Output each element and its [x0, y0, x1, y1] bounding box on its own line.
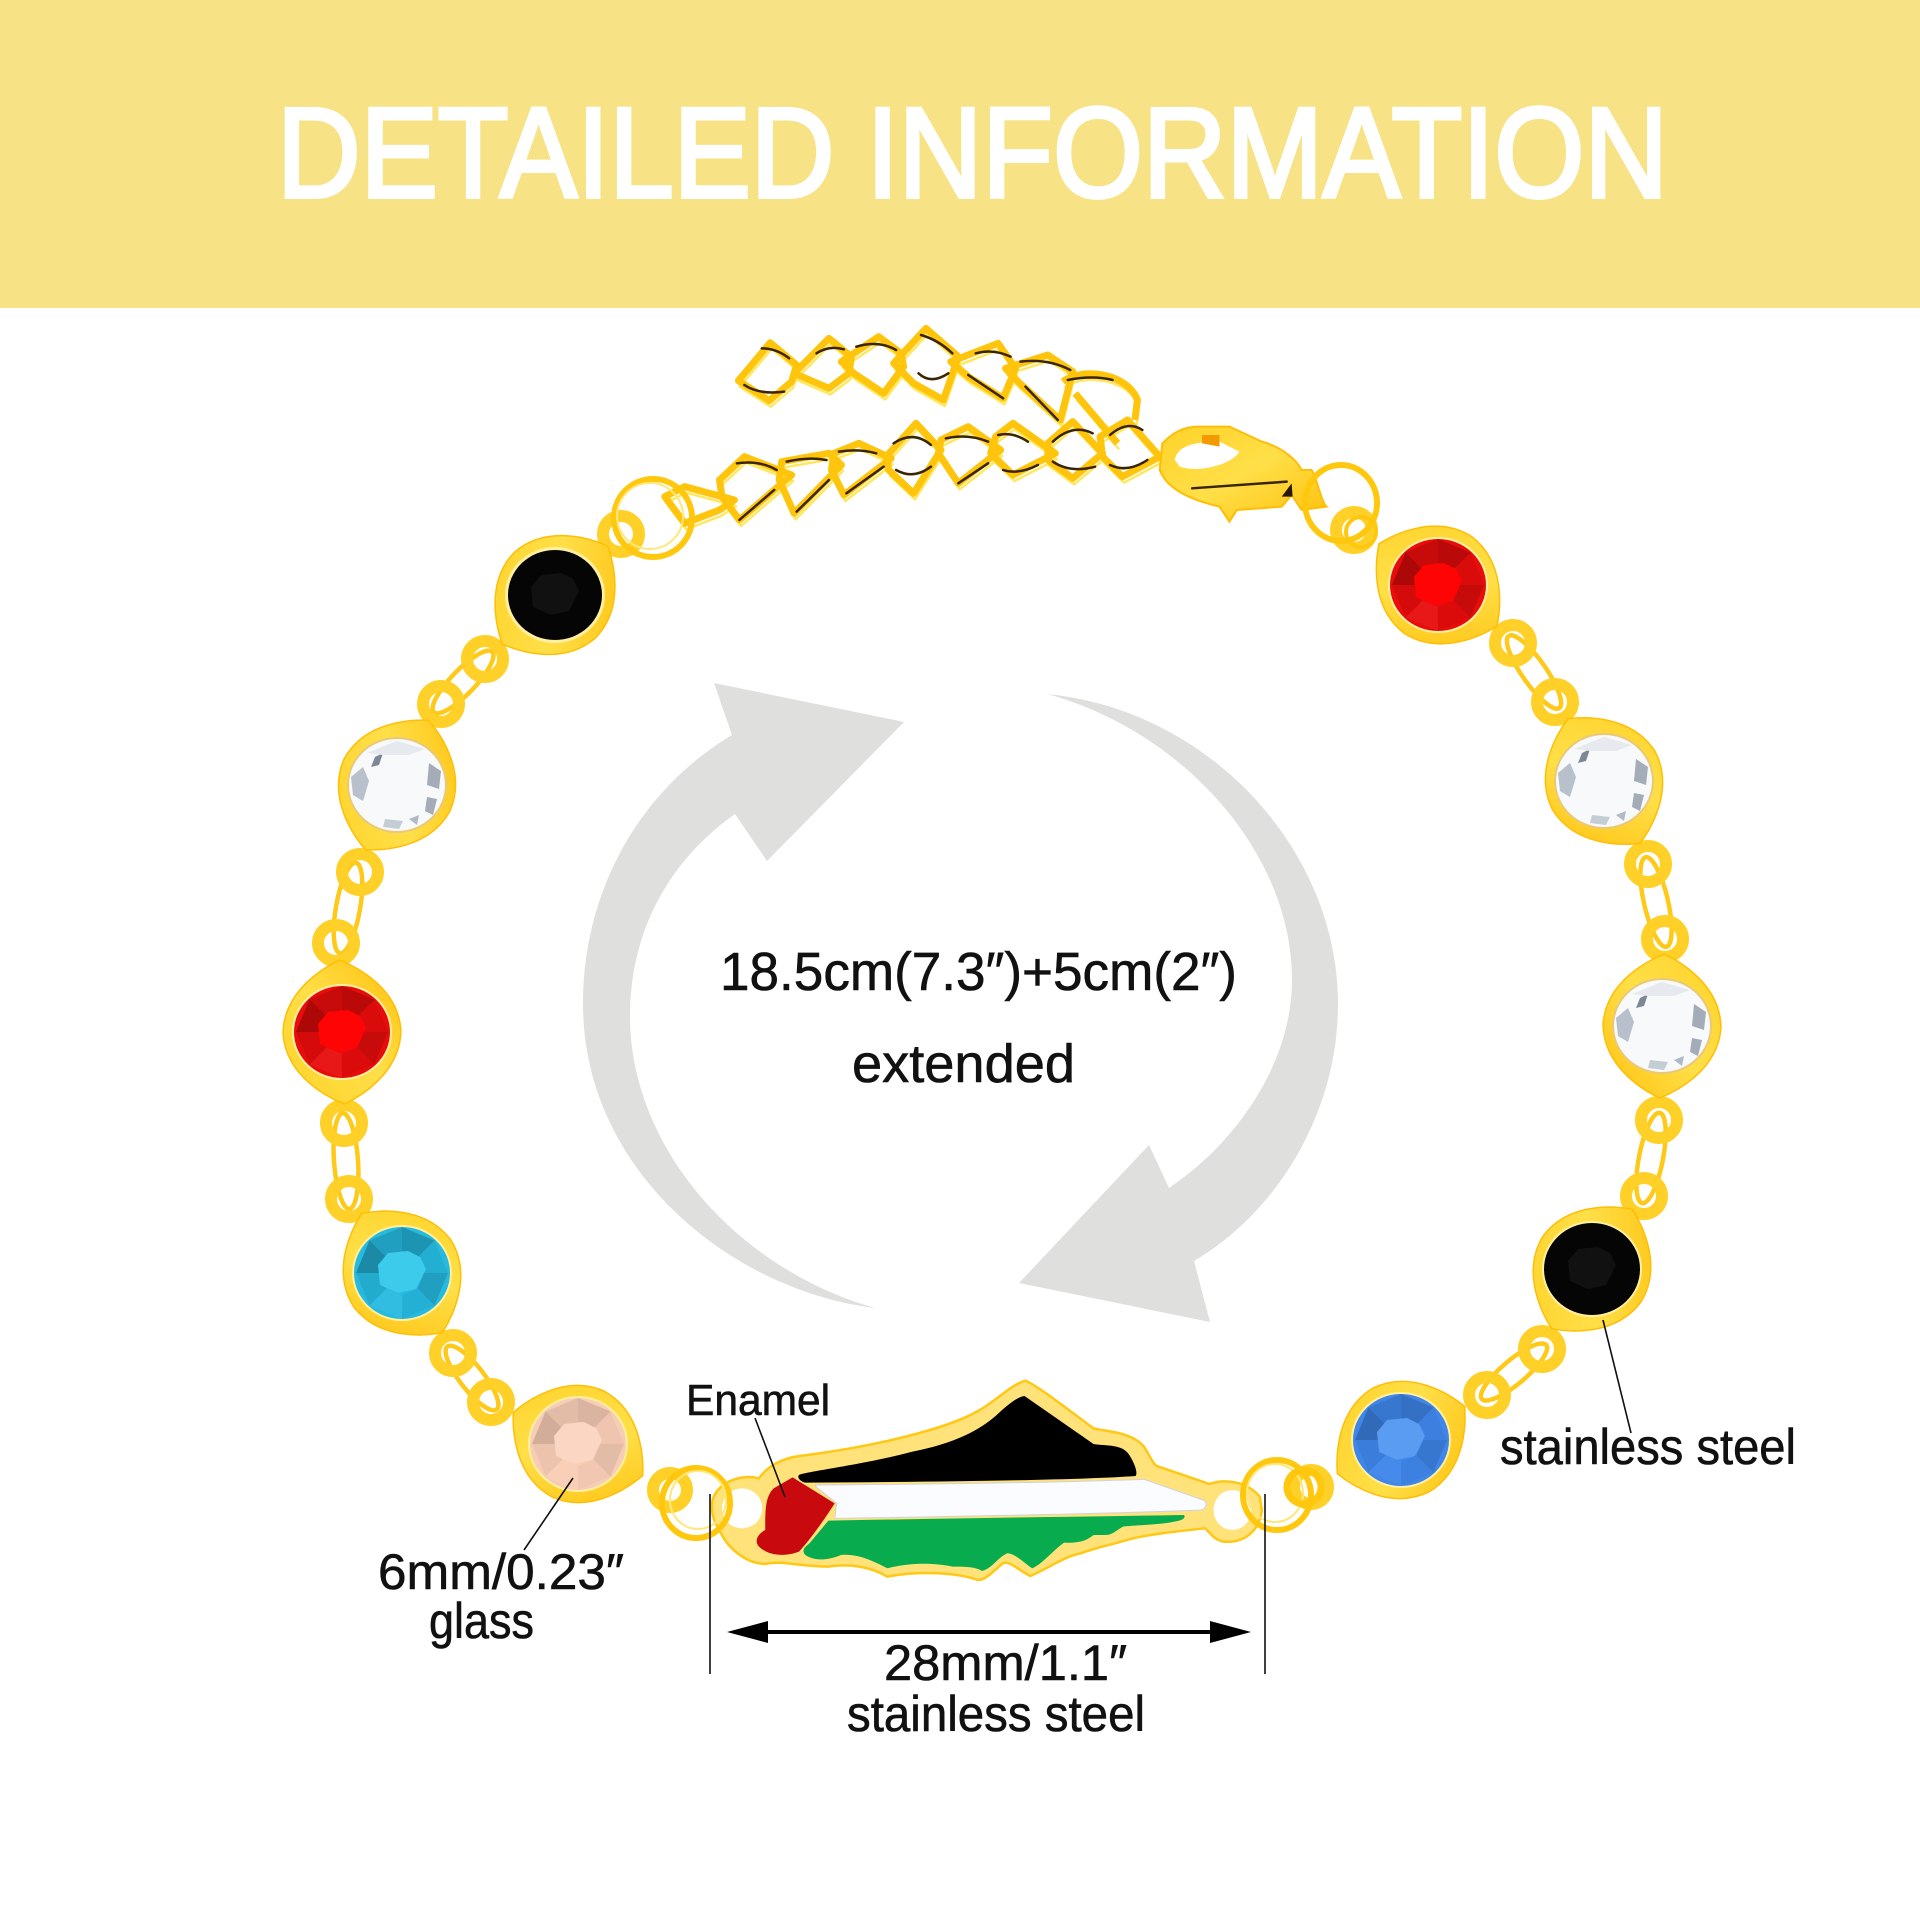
jump rings at clasp ends: [614, 465, 1377, 557]
gem: peach: [487, 1359, 669, 1529]
arrow: right swirl: [1019, 694, 1338, 1322]
flag red triangle: [757, 1477, 835, 1555]
lobster clasp: [1160, 427, 1326, 522]
callout: stainless steel: stainless steel: [1500, 1419, 1796, 1475]
chain links: [665, 328, 1161, 529]
flag green stripe: [803, 1515, 1185, 1571]
callout: glass gem size: glass: [429, 1593, 534, 1649]
header banner: [0, 0, 1920, 308]
callout: enamel: [686, 1376, 830, 1497]
dimension annotation: [710, 1494, 1265, 1742]
callout: stainless steel: [1500, 1320, 1796, 1475]
gem: clear left: [312, 694, 482, 876]
title: DETAILED INFORMATION: [277, 82, 1668, 225]
gem: blue: [1310, 1354, 1492, 1526]
pendant gold body: [712, 1381, 1262, 1580]
dimension annotation: 28mm/1.1″: [884, 1635, 1127, 1691]
dimension annotation: stainless steel: [847, 1686, 1145, 1742]
gem: clear right lower: [1601, 952, 1723, 1100]
gem: black left: [462, 503, 648, 687]
callout: glass gem size: 6mm/0.23″: [378, 1544, 624, 1600]
gem: clear right upper: [1517, 689, 1691, 873]
gem: black right: [1503, 1176, 1681, 1362]
pendant jump rings: [662, 1460, 1321, 1538]
length text: 18.5cm(7.3″)+5cm(2″): [720, 942, 1237, 1002]
extender chain and clasp: [665, 328, 1326, 529]
gem: aqua: [313, 1180, 491, 1366]
callout: glass gem size: [378, 1478, 624, 1649]
pendant: flag map: [712, 1381, 1262, 1580]
circular arrows: [583, 683, 1338, 1322]
length text: [720, 942, 1237, 1094]
callout: enamel: Enamel: [686, 1376, 830, 1425]
gem: red right: [1345, 495, 1531, 675]
flag white stripe: [816, 1479, 1206, 1518]
arrow: left swirl: [583, 683, 904, 1308]
length text: extended: [852, 1034, 1075, 1094]
pendant eyelet holes: [722, 1488, 1251, 1530]
connecting links: [328, 629, 1678, 1417]
gem: red left: [281, 958, 403, 1106]
frame eyelets: [318, 512, 1683, 1507]
flag black stripe: [798, 1396, 1136, 1483]
